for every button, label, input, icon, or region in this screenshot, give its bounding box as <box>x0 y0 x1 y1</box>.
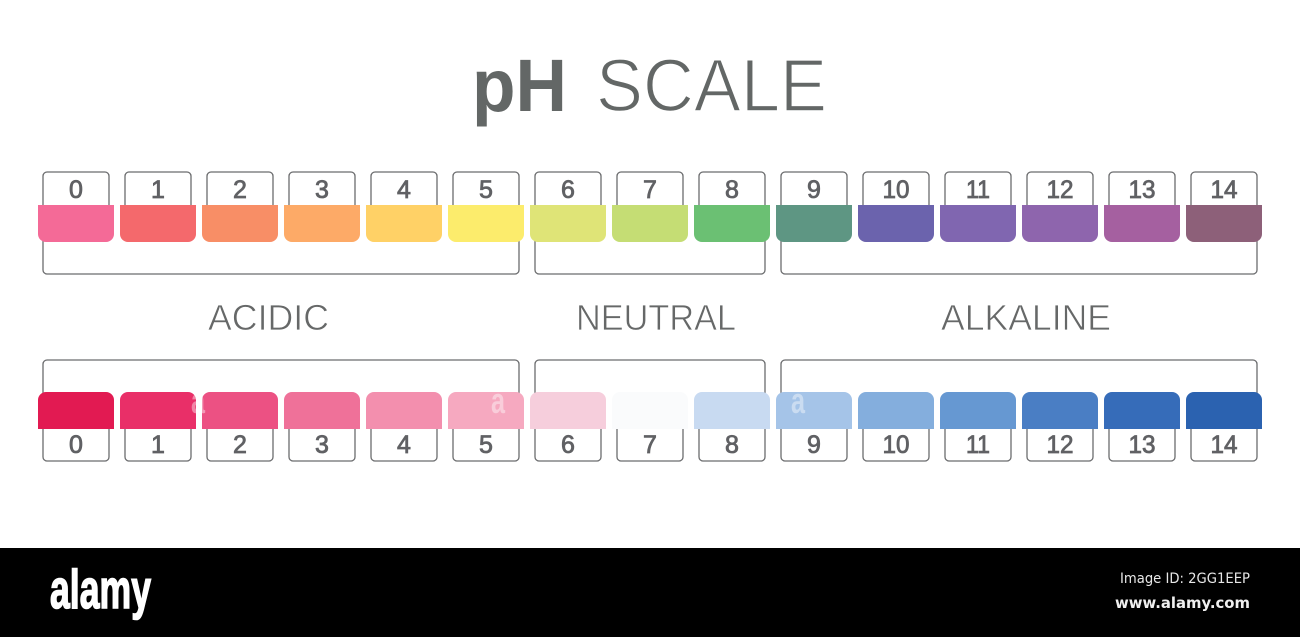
lower number tabs <box>43 426 1257 461</box>
title: pH <box>472 44 567 127</box>
lower number labels: 11 <box>966 431 990 459</box>
lower number labels: 12 <box>1046 431 1074 459</box>
upper number labels: 8 <box>725 176 739 204</box>
upper number labels <box>69 176 1238 204</box>
upper number labels: 0 <box>69 176 83 204</box>
upper number labels: 2 <box>233 176 247 204</box>
lower number labels: 3 <box>315 431 329 459</box>
upper number labels: 3 <box>315 176 329 204</box>
faint watermark marks: a <box>491 380 506 421</box>
upper number labels: 14 <box>1210 176 1238 204</box>
footer band <box>0 548 1300 637</box>
lower number labels: 13 <box>1128 431 1156 459</box>
upper number labels: 11 <box>966 176 990 204</box>
lower bracket: alkaline <box>781 360 1257 394</box>
lower number labels: 5 <box>479 431 493 459</box>
lower number labels: 1 <box>151 431 165 459</box>
upper number labels: 4 <box>397 176 411 204</box>
faint watermark marks: a <box>791 380 806 421</box>
upper number labels: 9 <box>807 176 821 204</box>
label: neutral: NEUTRAL <box>576 297 736 338</box>
lower number labels <box>69 431 1238 459</box>
faint watermark marks: a <box>191 380 206 421</box>
lower number labels: 9 <box>807 431 821 459</box>
lower number labels: 7 <box>643 431 657 459</box>
lower number labels: 6 <box>561 431 575 459</box>
upper bracket: alkaline <box>781 240 1257 274</box>
lower number labels: 2 <box>233 431 247 459</box>
lower bracket: acidic <box>43 360 519 394</box>
title <box>472 44 827 127</box>
upper number tabs <box>43 172 1257 208</box>
upper number labels: 5 <box>479 176 493 204</box>
title: SCALE <box>596 44 827 127</box>
upper number labels: 12 <box>1046 176 1074 204</box>
upper bracket: neutral <box>535 240 765 274</box>
upper number labels: 6 <box>561 176 575 204</box>
upper number labels: 13 <box>1128 176 1156 204</box>
upper number labels: 1 <box>151 176 165 204</box>
lower number labels: 4 <box>397 431 411 459</box>
lower number labels: 14 <box>1210 431 1238 459</box>
alamy logo: alamy <box>50 558 151 620</box>
lower bracket: neutral <box>535 360 765 394</box>
upper number labels: 10 <box>882 176 910 204</box>
lower number labels: 10 <box>882 431 910 459</box>
label: alkaline: ALKALINE <box>941 297 1111 338</box>
label: acidic: ACIDIC <box>208 297 329 338</box>
upper number labels: 7 <box>643 176 657 204</box>
upper bracket: acidic <box>43 240 519 274</box>
lower number labels: 8 <box>725 431 739 459</box>
faint watermark marks <box>191 380 806 421</box>
lower colour scale: red to blue pH strip <box>38 392 1262 429</box>
lower number labels: 0 <box>69 431 83 459</box>
website: www.alamy.com <box>1115 594 1250 612</box>
upper colour scale: rainbow pH strip <box>38 205 1262 242</box>
image id: Image ID: 2GG1EEP <box>1120 571 1250 587</box>
